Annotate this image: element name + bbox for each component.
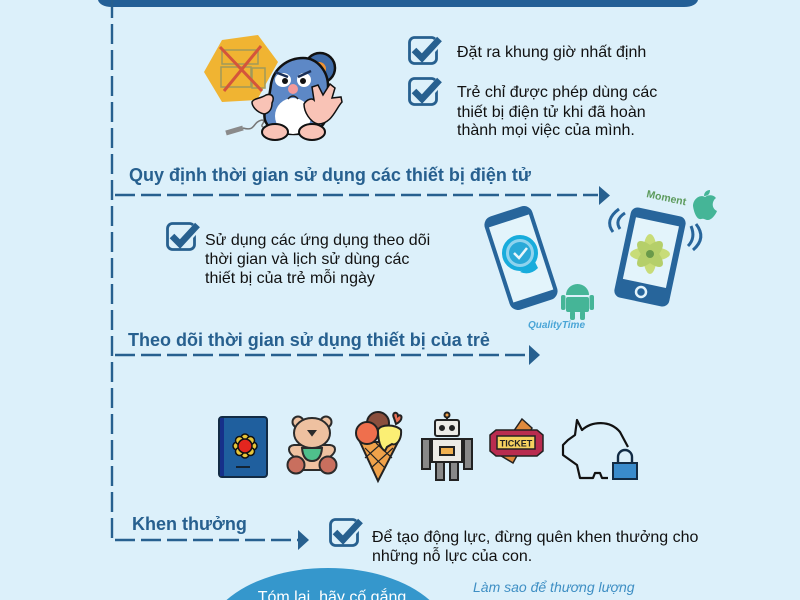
checkbox item: after finishing tasks: thành mọi việc của mình.	[457, 122, 635, 139]
checkbox item: rewards	[330, 520, 698, 565]
label: Moment: Moment	[645, 188, 688, 208]
checkbox item: tracking apps: thiết bị của trẻ mỗi ngày	[205, 268, 375, 287]
icon: Apple logo	[693, 190, 717, 220]
icon: robot	[422, 412, 472, 480]
checkbox item: rewards: những nỗ lực của con.	[372, 546, 532, 565]
label: QualityTime: QualityTime	[528, 320, 585, 331]
icon: ticket: TICKET	[500, 438, 533, 448]
checkbox item: after finishing tasks: Trẻ chỉ được phép dùng các	[457, 84, 657, 101]
timeline: vertical dashed line	[111, 0, 113, 541]
icon: piggy bank with lock	[563, 420, 637, 479]
checkbox item: tracking apps: Sử dụng các ứng dụng theo dõi	[205, 232, 430, 249]
icon: book	[219, 417, 267, 477]
checkbox item: tracking apps: thời gian và lịch sử dùng các	[205, 251, 409, 268]
heading: monitor device use: Theo dõi thời gian sử dụng thiết bị của trẻ	[128, 330, 490, 350]
icon: QualityTime phone	[482, 204, 560, 312]
heading: device time rules: Quy định thời gian sử dụng các thiết bị điện tử	[129, 165, 532, 185]
icon: teddy bear	[288, 416, 336, 474]
icon: ticket	[490, 419, 543, 463]
icon: Moment phone	[610, 206, 701, 308]
arrow: rewards	[115, 530, 309, 550]
summary bubble	[226, 568, 430, 600]
icon: angry mouse with crossed-out devices	[204, 35, 342, 140]
arrow: rules	[115, 186, 610, 205]
icon: Android logo	[561, 284, 594, 320]
checkbox item: fixed time: Đặt ra khung giờ nhất định	[457, 44, 646, 61]
checkbox item: tracking apps	[168, 224, 430, 287]
checkbox item: after finishing tasks	[410, 78, 657, 139]
checkbox item: after finishing tasks: thiết bị điện tử khi đã hoàn	[457, 104, 646, 121]
checkbox item: rewards: Để tạo động lực, đừng quên khen thưởng cho	[372, 528, 698, 546]
heading: rewards: Khen thưởng	[132, 514, 247, 534]
link text: negotiation: Làm sao để thương lượng	[473, 579, 635, 595]
arrow: monitoring	[115, 345, 540, 365]
top banner	[98, 0, 698, 7]
icon: ice cream cone	[356, 412, 402, 481]
checkbox item: fixed time	[410, 38, 646, 64]
